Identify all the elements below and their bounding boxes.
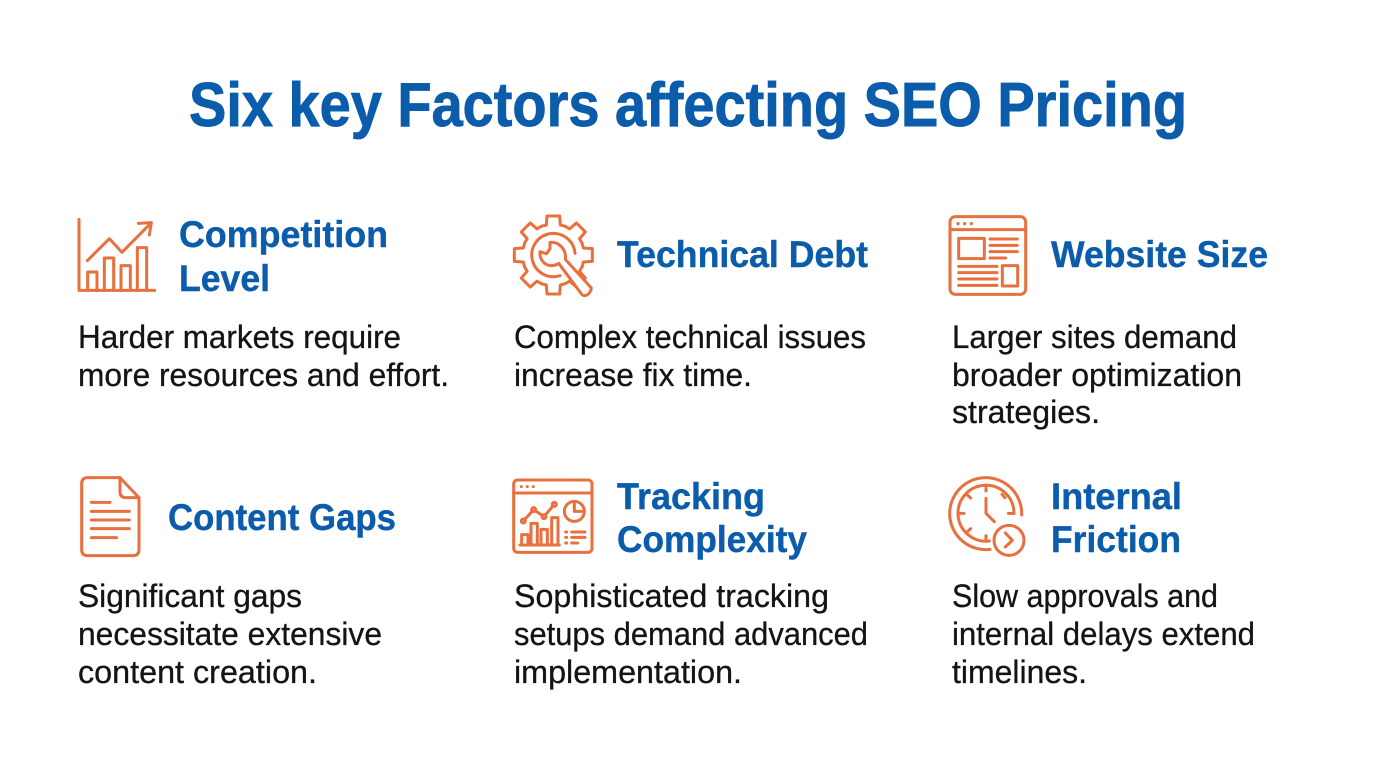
heading: competition level <box>179 214 388 299</box>
title: Six key Factors affecting SEO Pricing <box>189 71 1187 140</box>
panel: technical debt <box>514 216 868 393</box>
icon: document <box>82 478 139 556</box>
icon: rising bar chart <box>79 219 155 290</box>
text: website size description: strategies. <box>952 394 1100 430</box>
text: website size description: Larger sites demand <box>952 319 1237 355</box>
heading: tracking complexity <box>617 476 807 560</box>
icon: web page layout <box>950 217 1026 294</box>
icon: analytics dashboard <box>514 480 592 552</box>
text: content gaps description: Significant gaps <box>78 578 302 614</box>
text: website size description <box>952 319 1242 430</box>
text: internal friction description <box>952 578 1255 690</box>
text: content gaps description: content creation. <box>78 654 317 690</box>
text: technical debt description: increase fix time. <box>514 357 752 393</box>
panel: tracking complexity <box>514 476 868 690</box>
text: competition description: Harder markets require <box>78 319 401 355</box>
heading: technical debt: Technical Debt <box>617 234 868 275</box>
text: tracking complexity description: Sophisticated tracking <box>514 578 829 614</box>
heading: competition level: Competition <box>179 214 388 255</box>
panel: internal friction <box>950 476 1255 690</box>
icon: gear and wrench <box>514 216 592 296</box>
panel: website size <box>950 217 1268 430</box>
heading: internal friction: Internal <box>1051 476 1182 517</box>
heading: tracking complexity: Complexity <box>617 519 807 560</box>
heading: internal friction: Friction <box>1051 519 1181 560</box>
text: tracking complexity description: implementation. <box>514 654 742 690</box>
text: website size description: broader optimization <box>952 357 1242 393</box>
text: internal friction description: timelines. <box>952 654 1087 690</box>
text: competition description <box>78 319 449 393</box>
text: internal friction description: internal delays extend <box>952 616 1255 652</box>
text: tracking complexity description <box>514 578 868 690</box>
text: internal friction description: Slow approvals and <box>952 578 1218 614</box>
heading: website size: Website Size <box>1051 234 1268 275</box>
heading: tracking complexity: Tracking <box>617 476 765 517</box>
text: technical debt description <box>514 319 866 393</box>
text: technical debt description: Complex technical issues <box>514 319 866 355</box>
text: competition description: more resources and effort. <box>78 357 449 393</box>
heading: content gaps: Content Gaps <box>168 497 396 538</box>
text: tracking complexity description: setups demand advanced <box>514 616 868 652</box>
heading: competition level: Level <box>179 258 270 299</box>
panel: competition level <box>78 214 449 393</box>
text: content gaps description <box>78 578 382 690</box>
panel: content gaps <box>78 478 396 690</box>
icon: clock with arrow <box>950 478 1024 555</box>
text: content gaps description: necessitate extensive <box>78 616 382 652</box>
heading: internal friction <box>1051 476 1182 560</box>
